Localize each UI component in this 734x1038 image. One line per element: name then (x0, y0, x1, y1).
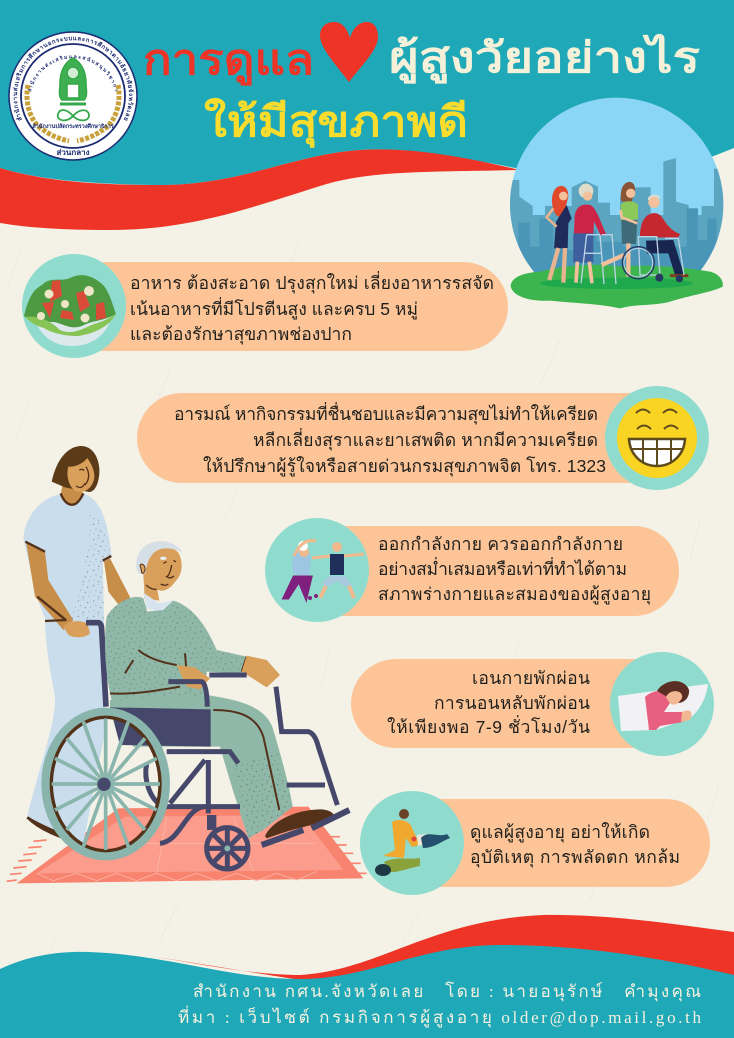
panel: exercise (265, 518, 679, 622)
head (52, 446, 99, 492)
rug (7, 807, 367, 883)
text: mood: ให้ปรึกษาผู้รู้ใจหรือสายด่วนกรมสุขภาพจิต โทร. 1323 (203, 456, 606, 477)
text: exercise: อย่างสม่ำเสมอหรือเท่าที่ทำได้ตาม (378, 557, 627, 579)
shoe (265, 809, 334, 838)
woman stretching (292, 546, 311, 578)
pill (92, 262, 508, 351)
panel: mood (137, 386, 709, 490)
text: food: เน้นอาหารที่มีโปรตีนสูง และครบ 5 หมู่ (130, 297, 418, 320)
panel: food (22, 254, 508, 358)
text: rest: ให้เพียงพอ 7-9 ชั่วโมง/วัน (387, 715, 590, 737)
footer source: ที่มา : เว็บไซต์ กรมกิจการผู้สูงอายุ older@dop.mail.go.th (178, 1005, 701, 1028)
text: rest (387, 668, 590, 737)
title word: care: การดูแล (143, 36, 314, 86)
right arm (104, 558, 131, 607)
logo bottom label: ส่วนกลาง (56, 148, 90, 157)
footer band (0, 915, 734, 1038)
text: accidents: อุบัติเหตุ การพลัดตก หกล้ม (470, 847, 680, 868)
icon: salad bowl (22, 254, 126, 358)
logo inner label: สำนักงานปลัดกระทรวงศึกษาธิการ (32, 122, 114, 130)
logo (8, 31, 138, 161)
text: food: และต้องรักษาสุขภาพช่องปาก (130, 324, 352, 345)
logo ring text: สำนักงานส่งเสริมการศึกษานอกระบบและการศึกษาตามอัธยาศัยจังหวัดเลย (12, 36, 134, 121)
text: mood: หลีกเลี่ยงสุราและยาเสพติด หากมีความเครียด (253, 428, 598, 451)
neck and shirt (61, 480, 83, 505)
illustration: caregiver pushing man in wheelchair (7, 446, 367, 883)
text: rest: การนอนหลับพักผ่อน (434, 693, 590, 713)
text: accidents (470, 822, 680, 868)
elderly woman with walker (573, 184, 616, 284)
dumbbell (308, 596, 312, 600)
logo emblem (58, 58, 89, 120)
pill (430, 799, 710, 887)
grass (511, 265, 723, 308)
text: exercise (378, 534, 651, 605)
pants (27, 618, 105, 843)
icon: exercise (265, 518, 369, 622)
far wheel frame (86, 623, 106, 707)
hand (63, 621, 90, 637)
teal wave (0, 945, 734, 1038)
large wheel (46, 712, 166, 856)
red wave (0, 149, 520, 230)
sky circle (510, 98, 724, 272)
man in stance (332, 542, 342, 552)
icon: grinning face (605, 386, 709, 490)
sweater (105, 597, 247, 700)
logo wreath (27, 85, 119, 141)
elderly man in wheelchair (622, 196, 688, 282)
hands (177, 665, 210, 689)
pill (137, 393, 660, 483)
icon: heart (320, 22, 378, 82)
text: rest: เอนกายพักผ่อน (472, 668, 590, 688)
text: exercise: สภาพร่างกายและสมองของผู้สูงอายุ (378, 584, 651, 605)
skyline (510, 158, 724, 272)
head (143, 546, 182, 601)
left arm (26, 542, 73, 630)
elderly man (105, 541, 334, 838)
caregiver (602, 182, 638, 277)
text: exercise: ออกกำลังกาย ควรออกกำลังกาย (378, 534, 623, 554)
header band (0, 0, 734, 230)
small caster wheel (207, 815, 248, 869)
text: food: อาหาร ต้องสะอาด ปรุงสุกใหม่ เลี่ยงอาหารรสจัด (130, 271, 494, 294)
footer credit: สำนักงาน กศน.จังหวัดเลย โดย : นายอนุรักษ์ คำมุงคุณ (193, 981, 701, 1002)
panel: rest (351, 652, 714, 756)
seat (110, 707, 211, 747)
speckles on shirt (67, 510, 112, 620)
scene: family in park (507, 98, 727, 311)
panel: accidents (360, 791, 710, 895)
chair frame (146, 675, 349, 845)
text: food (130, 271, 494, 345)
title (143, 22, 701, 148)
title word: the elderly: ผู้สูงวัยอย่างไร (389, 33, 701, 84)
text: mood (174, 402, 606, 477)
text: accidents: ดูแลผู้สูงอายุ อย่าให้เกิด (470, 822, 650, 843)
subtitle: ให้มีสุขภาพดี (204, 97, 468, 148)
text: mood: อารมณ์ หากิจกรรมที่ชื่นชอบและมีความสุขไม่ทำให้เครียด (174, 402, 598, 425)
woman in red hair (547, 186, 572, 283)
pill (351, 659, 650, 748)
icon: sleeping woman (610, 652, 714, 756)
red wave (145, 915, 734, 980)
icon: helping a fallen person (360, 791, 464, 895)
pill (330, 526, 679, 616)
legs (110, 695, 293, 838)
caregiver figure (23, 446, 131, 843)
